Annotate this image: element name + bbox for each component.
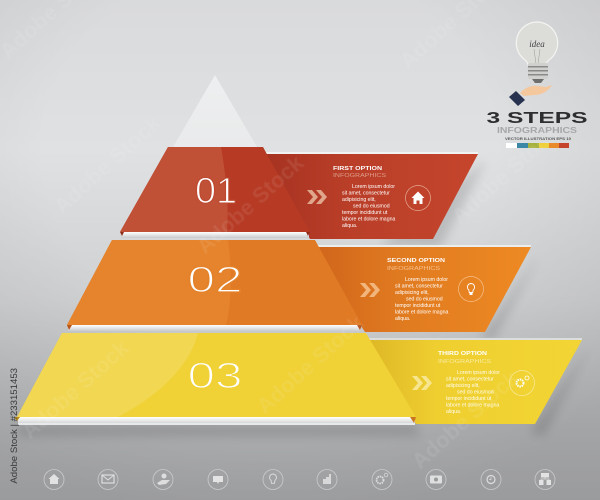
- watermarks: Adobe Stock: [407, 365, 524, 474]
- icon row: [44, 470, 555, 490]
- panel: first option: [255, 152, 478, 239]
- icon: mail: [98, 470, 118, 490]
- chevrons: first option: [307, 190, 327, 204]
- number 02: 02: [188, 259, 242, 300]
- heading: second option: SECOND OPTION: [387, 258, 446, 264]
- watermarks: Adobe Stock: [49, 110, 166, 219]
- body text: first option: sit amet, consectetur: [342, 190, 390, 196]
- body text: third option: sed do eiusmod: [457, 390, 494, 396]
- panel: second option: [310, 245, 531, 332]
- body text: third option: Lorem ipsum dolor: [457, 370, 500, 376]
- pyramid top triangle: [173, 75, 257, 147]
- pyramid tier 2: [67, 240, 362, 331]
- chevrons: third option: [412, 376, 432, 390]
- icon: hand with person: [153, 470, 173, 490]
- body text: third option: adipisicing elit,: [446, 383, 480, 389]
- body text: third option: labore et dolore magna: [446, 402, 499, 408]
- subheading: first option: INFOGRAPHICS: [333, 173, 387, 179]
- body text: second option: adipisicing elit,: [395, 290, 429, 296]
- watermarks: Adobe Stock: [447, 120, 564, 229]
- body text: first option: Lorem ipsum dolor: [352, 184, 395, 190]
- body text: second option: labore et dolore magna: [395, 310, 448, 316]
- icon: speech bubble: [208, 470, 228, 490]
- panel: third option: [360, 338, 582, 424]
- number 01: 01: [195, 170, 237, 211]
- watermarks: Adobe Stock: [252, 310, 369, 419]
- heading: first option: FIRST OPTION: [333, 166, 383, 172]
- icon: bar chart: [317, 470, 337, 490]
- body text: first option: sed do eiusmod: [353, 204, 390, 210]
- icon: gears: [372, 470, 392, 490]
- icon: hierarchy: [535, 470, 555, 490]
- body text: third option: sit amet, consectetur: [446, 376, 494, 382]
- body text: second option: aliqua.: [395, 316, 410, 322]
- heading: third option: THIRD OPTION: [438, 351, 488, 357]
- watermarks: Adobe Stock: [17, 335, 134, 444]
- body text: first option: labore et dolore magna: [342, 216, 395, 222]
- panel shadows: [16, 160, 590, 436]
- subtitle: infographics: INFOGRAPHICS: [497, 126, 578, 135]
- icon: home: [406, 186, 430, 210]
- icon: money: [426, 470, 446, 490]
- body text: first option: adipisicing elit,: [342, 197, 376, 203]
- pyramid tier 1: [120, 147, 310, 238]
- watermarks: Adobe Stock: [192, 150, 309, 259]
- icon: light bulb in hand: idea: [529, 39, 545, 49]
- body text: second option: tempor incididunt ut: [395, 303, 441, 309]
- body text: second option: Lorem ipsum dolor: [405, 277, 448, 283]
- body text: first option: tempor incididunt ut: [342, 210, 388, 216]
- subheading: third option: INFOGRAPHICS: [438, 359, 492, 365]
- colour swatches: [506, 143, 569, 148]
- subheading: second option: INFOGRAPHICS: [387, 266, 441, 272]
- pyramid tier 3: [14, 333, 416, 425]
- logo: 3 steps with bulb: [486, 22, 588, 148]
- body text: second option: sed do eiusmod: [406, 296, 443, 302]
- icon: gears: [510, 370, 534, 396]
- chevrons: second option: [360, 283, 380, 297]
- body text: third option: tempor incididunt ut: [446, 396, 492, 402]
- body text: second option: sit amet, consectetur: [395, 284, 443, 290]
- body text: third option: [446, 370, 500, 415]
- body text: third option: aliqua.: [446, 409, 461, 415]
- title: 3 steps: 3 STEPS: [486, 110, 588, 127]
- body text: second option: [395, 277, 448, 322]
- number 03: 03: [188, 355, 242, 396]
- icon: light bulb: [263, 470, 283, 490]
- icon: home: [44, 470, 64, 490]
- icon: clock: [481, 470, 501, 490]
- caption: vector illustration: VECTOR ILLUSTRATION EPS 10: [505, 137, 571, 141]
- icon: light bulb: [458, 276, 484, 302]
- image id caption: Adobe Stock | #233151453: [9, 368, 20, 484]
- body text: first option: [342, 184, 395, 229]
- body text: first option: aliqua.: [342, 223, 357, 229]
